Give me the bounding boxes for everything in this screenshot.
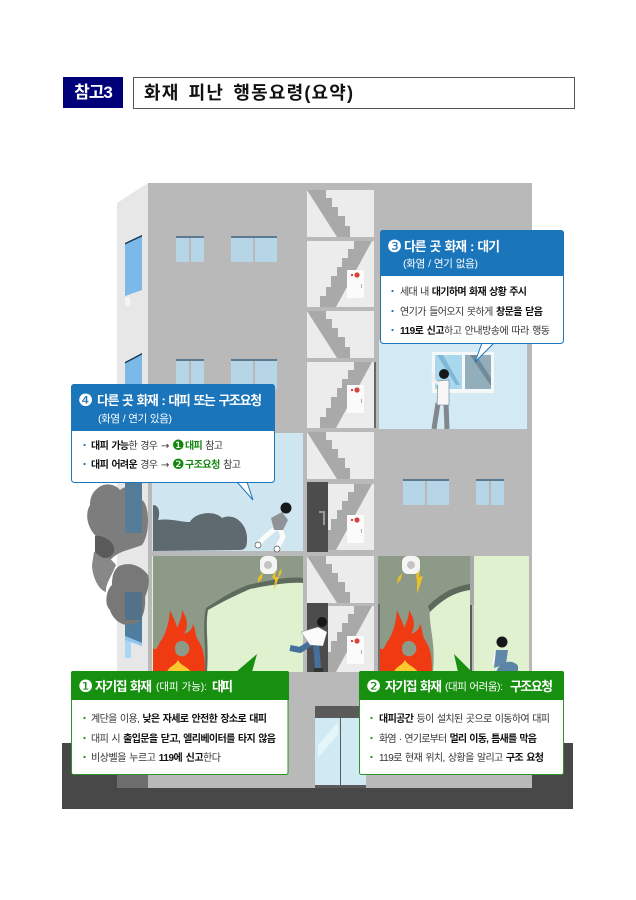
text: → (161, 441, 169, 452)
header: ❶ (78, 677, 93, 697)
header: 대피 (212, 679, 233, 694)
tail (454, 654, 472, 672)
header: 자기집 화재 (95, 679, 152, 694)
tail (236, 654, 257, 672)
header: ❷ (366, 677, 381, 697)
fire (153, 610, 205, 672)
sparks (258, 568, 282, 590)
text: 119로 현재 위치, 상황을 알리고 구조 요청 (379, 751, 544, 764)
ground (62, 743, 573, 809)
smoke (153, 505, 247, 551)
text (83, 712, 276, 764)
text: 계단을 이용, 낮은 자세로 안전한 장소로 대피 (91, 712, 267, 725)
header (71, 671, 289, 700)
entrance (315, 706, 366, 788)
callout 2 (359, 654, 564, 774)
header: 다른 곳 화재 : 대기 (404, 239, 500, 254)
heading tag: 참고3: 참고3 (74, 83, 112, 102)
text (391, 285, 550, 337)
heading tag: 참고3 (63, 77, 123, 108)
header: 다른 곳 화재 : 대피 또는 구조요청 (97, 393, 262, 408)
callout 3 (380, 230, 564, 362)
callout 1 (71, 654, 289, 774)
header (359, 671, 564, 700)
title: 화재 피난 행동요령(요약) (144, 83, 353, 103)
stairwell (307, 190, 374, 672)
text: 대피 시 출입문을 닫고, 엘리베이터를 타지 않음 (91, 732, 276, 745)
text: → (161, 460, 169, 471)
text: ❷ (172, 457, 185, 473)
text: 119로 신고하고 안내방송에 따라 행동 (400, 324, 550, 337)
crouching person (492, 636, 518, 672)
text: 대피 참고 (185, 439, 223, 452)
dark stair doors (307, 482, 328, 672)
text: 대피공간 등이 설치된 곳으로 이동하여 대피 (379, 712, 550, 725)
person at window (433, 369, 449, 429)
fire room 2 (378, 556, 529, 672)
header: ❹ (78, 391, 93, 411)
text: 대피 가능한 경우 (91, 439, 158, 452)
text: 세대 내 대기하며 화재 상황 주시 (400, 285, 527, 298)
text: 대피 어려운 경우 (91, 458, 158, 471)
text: 구조요청 참고 (185, 458, 241, 471)
running person (255, 502, 292, 552)
fire (380, 610, 432, 672)
text (370, 712, 550, 764)
header: (화염 / 연기 없음) (403, 257, 478, 270)
header: ❸ (387, 237, 402, 257)
smoke detector (402, 556, 420, 574)
escaping person (290, 617, 327, 672)
room 4: smoke corridor (152, 433, 303, 552)
window (432, 352, 494, 393)
header: (대피 가능): (156, 681, 207, 693)
side windows (125, 235, 142, 658)
callout 4 (71, 384, 275, 500)
header: 구조요청 (510, 679, 553, 694)
outside smoke plume (87, 484, 149, 625)
smoke detector (260, 556, 277, 574)
front windows (176, 236, 504, 505)
header (71, 384, 275, 431)
text (83, 438, 241, 473)
text: 연기가 들어오지 못하게 창문을 닫음 (400, 305, 543, 318)
text: 화염 · 연기로부터 멀리 이동, 틈새를 막음 (379, 732, 537, 745)
tail (475, 343, 494, 362)
sparks (397, 570, 423, 594)
text: ❶ (172, 438, 185, 454)
header: 자기집 화재 (385, 679, 442, 694)
text: 비상벨을 누르고 119에 신고한다 (91, 751, 221, 764)
building (117, 183, 532, 788)
header: (화염 / 연기 있음) (98, 413, 172, 425)
tail (237, 482, 253, 500)
fire room 1 (152, 556, 327, 672)
room 3: waiting (374, 340, 527, 429)
header: (대피 어려움): (445, 681, 503, 693)
header (380, 230, 564, 276)
title (134, 78, 574, 108)
